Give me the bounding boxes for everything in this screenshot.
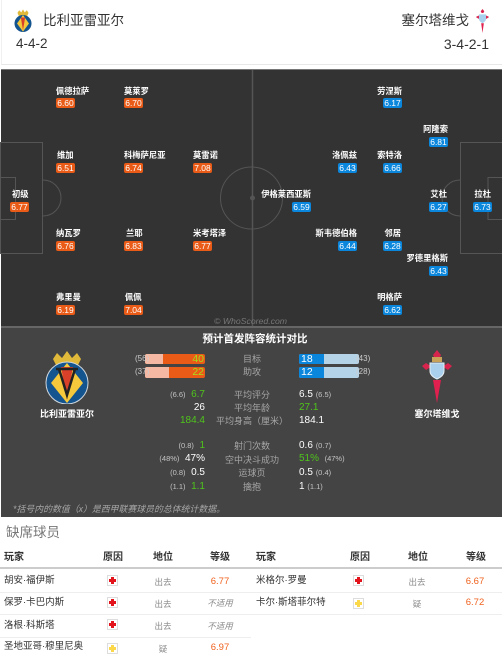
stat: average height home: 184.4 (180, 415, 205, 426)
stats heading: 预计首发阵容统计对比 (202, 333, 308, 345)
missing row: 圣地亚哥·穆里尼奥: 圣地亚哥·穆里尼奥 (4, 641, 83, 652)
player: 罗德里格斯: 6.43 (430, 266, 447, 276)
player: 斯韦德伯格: 6.44 (339, 241, 356, 251)
text: (28) (356, 367, 370, 376)
label: dribbles: 运球页 (238, 468, 266, 478)
stat: average age away: 27.1 (299, 402, 318, 413)
label: aerials: 空中决斗成功 (225, 455, 279, 465)
label: tackles: 擒抱 (243, 482, 261, 492)
icon: Villarreal crest small (14, 10, 32, 32)
missing row: 圣地亚哥·穆里尼奥 (0, 640, 251, 654)
player: 罗德里格斯 (406, 253, 448, 276)
header: team names and formations (1, 0, 502, 65)
text: (43) (356, 354, 370, 363)
icon: Celta crest large (422, 350, 452, 403)
player: 维加 (56, 150, 75, 173)
missing row: 洛根·科斯塔: 不适用 (207, 621, 233, 631)
player: 莫莱罗 (124, 86, 149, 108)
missing row: 胡安·福伊斯: 胡安·福伊斯 (4, 575, 55, 586)
bar: assists away: 12 (301, 366, 313, 378)
table header: away: 等级 (466, 552, 486, 563)
stat: average rating away: 6.5 (6.5) (299, 389, 331, 400)
missing row: 米格尔·罗曼 (251, 574, 502, 591)
bar: goals away: 18 (301, 353, 313, 365)
player: 斯韦德伯格 (316, 228, 357, 251)
player: 莫莱罗: 6.70 (125, 98, 142, 108)
stat: aerials home: (48%) 47% (159, 453, 205, 464)
bar: goals away (299, 354, 359, 364)
missing row: 保罗·卡巴内斯: 出去 (154, 599, 172, 609)
player: 维加: 维加 (57, 150, 74, 160)
player: 罗德里格斯: 罗德里格斯 (406, 253, 448, 263)
missing row: 保罗·卡巴内斯: 保罗·卡巴内斯 (4, 597, 64, 608)
table header: away: 玩家 (256, 552, 276, 563)
stat: average height away: 184.1 (299, 415, 324, 426)
stat: average age home: 26 (194, 402, 205, 413)
away team label: 塞尔塔维戈 (414, 409, 460, 419)
player: 伊格莱西亚斯: 6.59 (293, 202, 310, 212)
label: average rating: 平均评分 (234, 390, 270, 400)
stat: shots home: (0.8) 1 (178, 440, 205, 451)
missing row: 洛根·科斯塔: 洛根·科斯塔 (4, 620, 55, 631)
text: (37) (135, 367, 149, 376)
player: 艾杜: 6.27 (430, 202, 447, 212)
player: 洛佩兹: 6.43 (339, 163, 356, 173)
table header: home: 地位 (153, 552, 173, 563)
player: 莫雷诺: 7.08 (194, 163, 211, 173)
stat: tackles away: 1 (1.1) (299, 481, 323, 492)
player: 弗里曼 (56, 292, 81, 315)
player: 米考塔泽 (193, 228, 226, 251)
player: 邻居: 6.28 (384, 241, 401, 251)
player: 莫莱罗: 莫莱罗 (124, 86, 149, 96)
player: 索特洛 (377, 150, 402, 173)
away team name: 塞尔塔维戈 (402, 13, 469, 28)
label: goals: 目标 (243, 354, 261, 364)
player: 洛佩兹: 洛佩兹 (332, 150, 357, 160)
home formation: 4-4-2 (16, 36, 48, 51)
player: 初级: 初级 (12, 189, 29, 199)
player: 索特洛: 6.66 (384, 163, 401, 173)
player: 莫雷诺 (193, 150, 218, 173)
player: 莫雷诺: 莫雷诺 (193, 150, 218, 160)
missing row: 卡尔·斯塔菲尔特: 疑 (413, 599, 421, 609)
player: 纳瓦罗: 纳瓦罗 (56, 228, 81, 238)
player: 索特洛: 索特洛 (377, 150, 402, 160)
missing row: 洛根·科斯塔: 出去 (154, 621, 172, 631)
player: 邻居: 邻居 (384, 228, 401, 238)
stat: aerials away: 51% (47%) (299, 453, 345, 464)
missing row: 米格尔·罗曼: 6.67 (466, 576, 484, 587)
bar: goals home: 40 (192, 353, 204, 365)
player: 伊格莱西亚斯 (261, 189, 311, 212)
panel: pitch (1, 69, 502, 326)
player: 邻居 (383, 228, 402, 251)
player: 科梅萨尼亚: 科梅萨尼亚 (124, 150, 166, 160)
missing row: 米格尔·罗曼: 米格尔·罗曼 (256, 575, 307, 586)
player: 劳涅斯: 6.17 (384, 98, 401, 108)
player: 佩佩: 佩佩 (125, 292, 142, 302)
player: 弗里曼: 6.19 (57, 305, 74, 315)
player: 劳涅斯: 劳涅斯 (377, 86, 402, 96)
player: 拉杜: 拉杜 (474, 189, 491, 199)
footnote: *括号内的数值（x）是西甲联赛球员的总体统计数据。 (13, 504, 225, 514)
player: 明格萨 (377, 292, 402, 315)
label: shots: 射门次数 (234, 441, 270, 451)
player: 初级: 6.77 (11, 202, 28, 212)
bar: goals home (145, 354, 205, 364)
player: 佩佩 (124, 292, 143, 315)
bar: assists home: 22 (192, 366, 204, 378)
player: 阿隆索: 6.81 (430, 137, 447, 147)
table header: home: 原因 (103, 552, 123, 563)
icon: Villarreal crest large (46, 351, 88, 404)
stat: shots away: 0.6 (0.7) (299, 440, 331, 451)
missing row: 洛根·科斯塔 (4, 619, 234, 631)
label: average height: 平均身高（厘米） (216, 416, 288, 426)
stat: dribbles away: 0.5 (0.4) (299, 467, 331, 478)
table header: away (251, 551, 502, 569)
missing row: 保罗·卡巴内斯 (4, 596, 234, 609)
table header: home: 等级 (210, 552, 230, 563)
missing row: 圣地亚哥·穆里尼奥: 疑 (159, 644, 167, 654)
missing row: 胡安·福伊斯: 出去 (154, 577, 172, 587)
heading: missing players: 缺席球员 (6, 525, 60, 540)
player: 兰耶 (124, 228, 143, 251)
table header: home (0, 551, 251, 569)
player: 伊格莱西亚斯: 伊格莱西亚斯 (261, 189, 311, 199)
player: 纳瓦罗 (56, 228, 81, 251)
player: 阿隆索: 阿隆索 (423, 124, 448, 134)
player: 拉杜 (473, 189, 492, 212)
icon: Celta crest small (476, 9, 489, 33)
player: 阿隆索 (423, 124, 448, 147)
player: 斯韦德伯格: 斯韦德伯格 (316, 228, 357, 238)
player: 纳瓦罗: 6.76 (57, 241, 74, 251)
player: 科梅萨尼亚 (124, 150, 166, 173)
missing row: 卡尔·斯塔菲尔特: 卡尔·斯塔菲尔特 (256, 597, 326, 608)
away formation: 3-4-2-1 (444, 36, 489, 52)
player: 洛佩兹 (332, 150, 357, 173)
player: 初级 (10, 189, 29, 212)
player: 佩德拉萨: 6.60 (57, 98, 74, 108)
missing row: 圣地亚哥·穆里尼奥: 6.97 (211, 642, 229, 653)
player: 艾杜: 艾杜 (430, 189, 447, 199)
table header: away: 原因 (350, 552, 370, 563)
player: 佩佩: 7.04 (125, 305, 142, 315)
player: 弗里曼: 弗里曼 (56, 292, 81, 302)
missing row: 米格尔·罗曼: 出去 (408, 577, 426, 587)
player: 艾杜 (429, 189, 448, 212)
player: 科梅萨尼亚: 6.74 (125, 163, 142, 173)
player: 米考塔泽: 6.77 (194, 241, 211, 251)
player: 佩德拉萨 (56, 86, 89, 108)
bar: assists home (145, 367, 205, 378)
missing row: 胡安·福伊斯: 6.77 (211, 576, 229, 587)
missing row: 保罗·卡巴内斯: 不适用 (207, 598, 233, 608)
home team name: 比利亚雷亚尔 (43, 13, 124, 28)
player: 兰耶: 兰耶 (126, 228, 143, 238)
missing row: 胡安·福伊斯 (4, 574, 229, 587)
player: 明格萨: 明格萨 (377, 292, 402, 302)
text: (56) (135, 354, 149, 363)
home team label: 比利亚雷亚尔 (40, 409, 94, 419)
pitch markings (0, 70, 502, 326)
player: 兰耶: 6.83 (125, 241, 142, 251)
label: average age: 平均年龄 (234, 403, 270, 413)
watermark: © WhoScored.com (214, 316, 287, 326)
player: 明格萨: 6.62 (384, 305, 401, 315)
table header: away: 地位 (408, 552, 428, 563)
label: assists: 助攻 (243, 367, 261, 377)
player: 劳涅斯 (377, 86, 402, 108)
missing row: 卡尔·斯塔菲尔特 (251, 596, 502, 613)
player: 维加: 6.51 (57, 163, 74, 173)
missing row: 卡尔·斯塔菲尔特: 6.72 (466, 597, 484, 608)
stat: dribbles home: (0.8) 0.5 (170, 467, 205, 478)
player: 米考塔泽: 米考塔泽 (193, 228, 226, 238)
table header: home: 玩家 (4, 552, 24, 563)
bar: assists away (299, 367, 359, 378)
panel: predicted lineup stats comparison (1, 326, 502, 517)
player: 拉杜: 6.73 (474, 202, 491, 212)
player: 佩德拉萨: 佩德拉萨 (56, 86, 89, 96)
stat: tackles home: (1.1) 1.1 (170, 481, 205, 492)
stat: average rating home: (6.6) 6.7 (170, 389, 205, 400)
